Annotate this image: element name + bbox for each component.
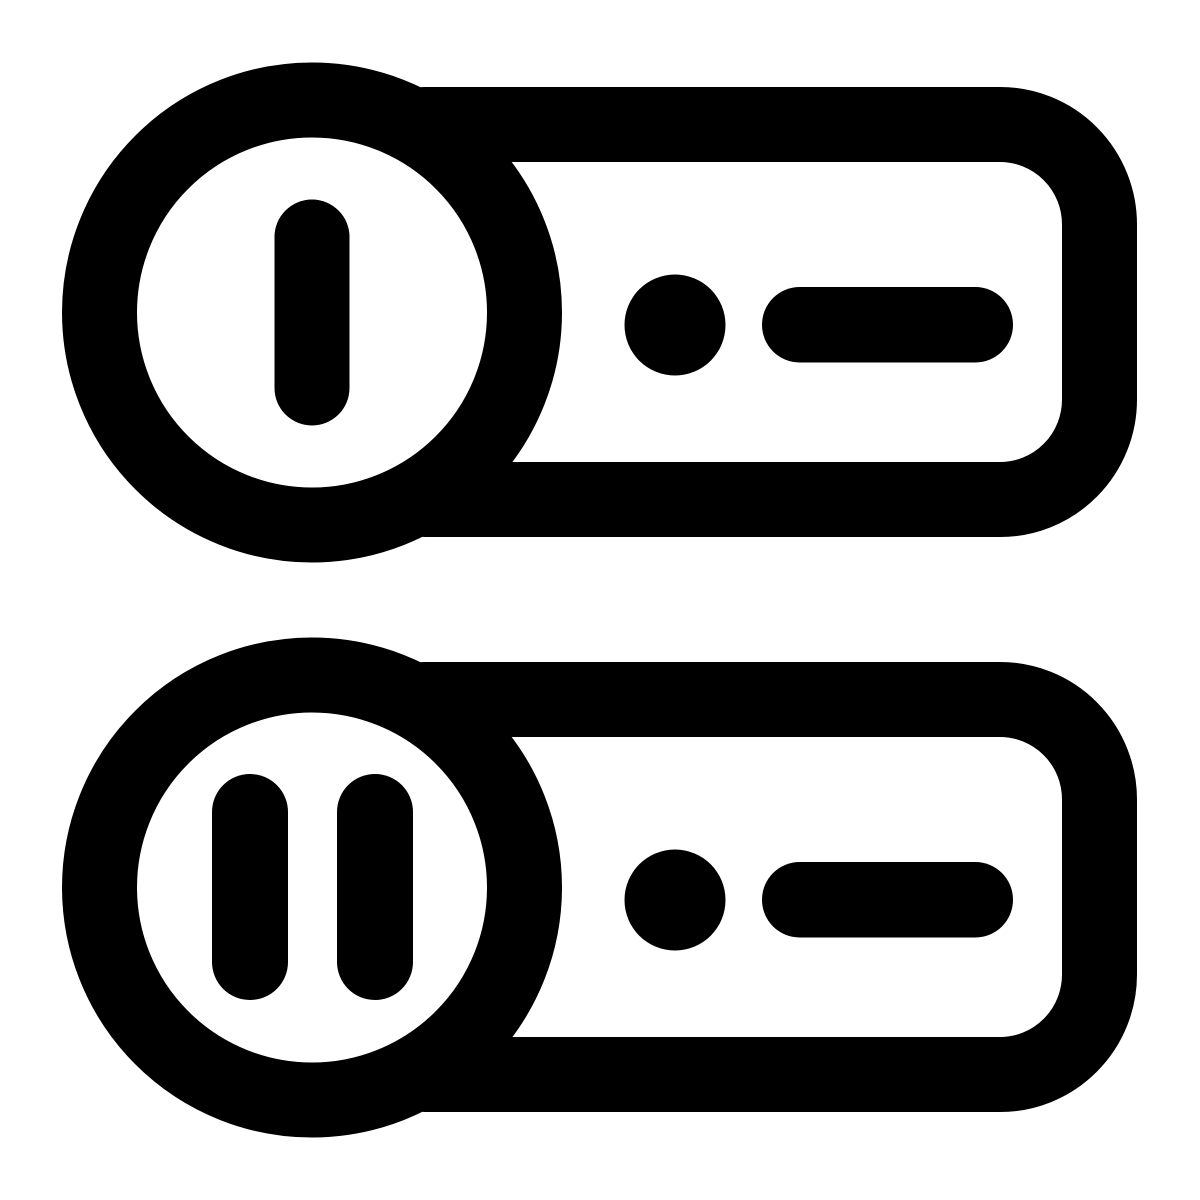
toggle: bottom switch, two bars	[100, 675, 1100, 1100]
right vertical bar: bottom knob	[337, 774, 413, 1000]
left vertical bar: bottom knob	[212, 774, 288, 1000]
knob ring: top	[100, 100, 524, 525]
indicator dash: top	[762, 287, 1013, 362]
vertical bar: top knob	[274, 200, 350, 426]
knob ring: bottom	[100, 675, 524, 1100]
switch track: bottom	[425, 700, 1100, 1074]
indicator dash: bottom	[762, 862, 1013, 938]
switch track: top	[425, 124, 1100, 500]
toggle: top switch, one bar	[100, 100, 1100, 525]
indicator dot: bottom	[624, 850, 726, 950]
indicator dot: top	[624, 274, 726, 376]
